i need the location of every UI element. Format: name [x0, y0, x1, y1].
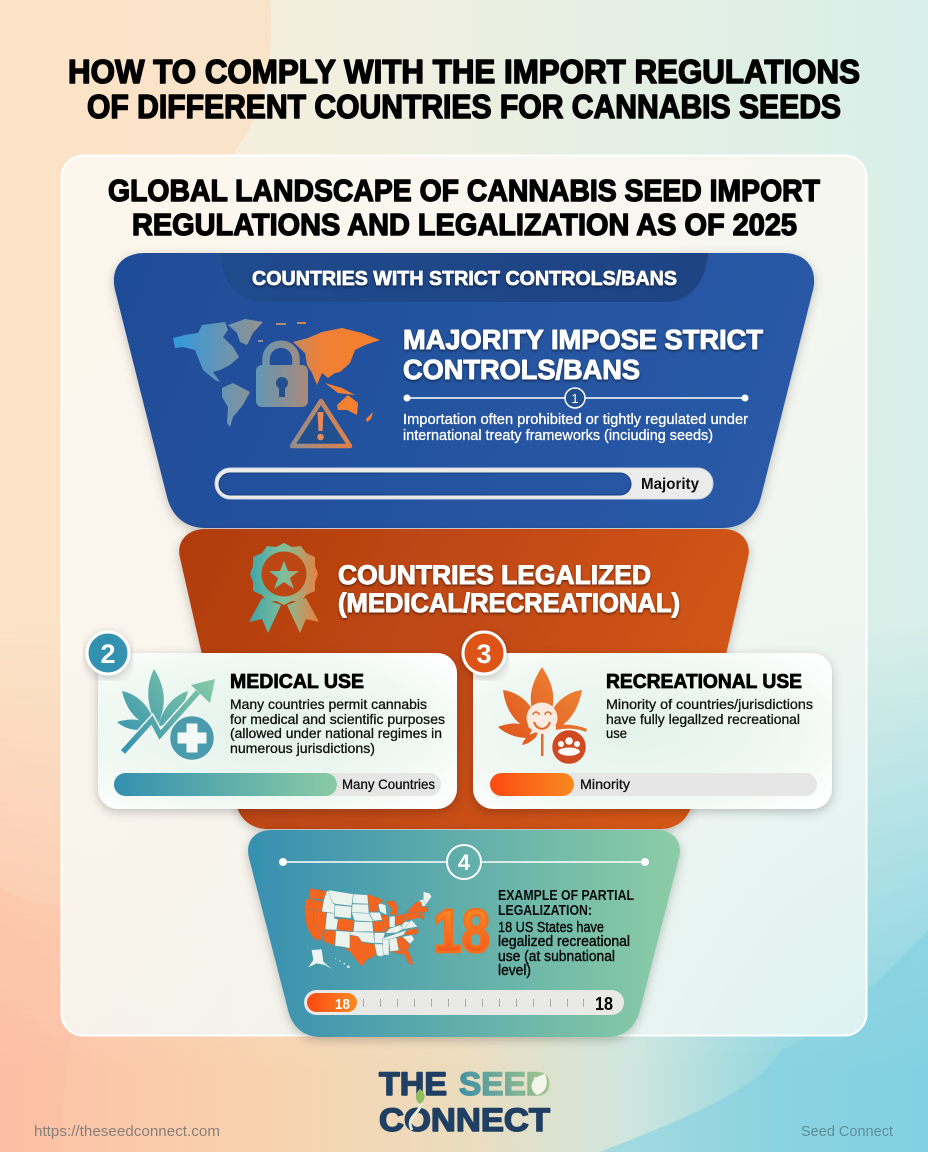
icon: warning triangle — [292, 401, 350, 446]
heading: majority: CONTROLS/BANS — [403, 354, 640, 385]
title: HOW TO COMPLY WITH THE IMPORT REGULATIONS — [68, 54, 860, 91]
logo: The Seed Connect: CONNECT — [379, 1102, 550, 1138]
badge 3 — [463, 632, 505, 674]
text: partial legalization — [498, 888, 634, 979]
bar: minority — [490, 773, 817, 796]
text: partial legalization: level) — [498, 963, 531, 979]
subtitle — [108, 173, 820, 242]
icon: medical leaf with arrow and plus — [117, 669, 215, 760]
text: recreational: Minority of countries/jurisdictions — [606, 696, 813, 712]
text: partial legalization: 18 US States have — [498, 920, 604, 936]
funnel tier 2: legalized — [179, 529, 749, 829]
text: partial legalization: legalized recreational — [498, 934, 630, 950]
icon: world map — [173, 319, 380, 427]
icon: rosette — [249, 543, 319, 633]
big number 18: 18 — [433, 897, 490, 965]
heading: majority: MAJORITY IMPOSE STRICT — [403, 324, 763, 355]
map: United States — [304, 888, 432, 969]
text: importation — [403, 411, 748, 444]
badge 2 — [87, 632, 129, 674]
text: recreational: use — [606, 725, 627, 741]
badge 2: 2 — [100, 639, 116, 669]
card: medical use — [98, 653, 457, 809]
heading: countries legalized: COUNTRIES LEGALIZED — [338, 560, 651, 590]
badge 3: 3 — [476, 639, 492, 669]
text: medical: (allowed under national regimes in — [230, 725, 442, 741]
footer: url: https://theseedconnect.com — [34, 1123, 220, 1140]
card: recreational use — [473, 653, 832, 809]
text: partial legalization: LEGALIZATION: — [498, 903, 592, 919]
subtitle: GLOBAL LANDSCAPE OF CANNABIS SEED IMPORT — [108, 173, 820, 208]
funnel tier 3: partial legalization — [248, 830, 680, 1037]
text: medical: numerous jurisdictions) — [230, 740, 375, 756]
heading: countries legalized: (MEDICAL/RECREATIONAL) — [338, 588, 680, 618]
text: recreational — [606, 696, 813, 741]
heading: countries legalized — [338, 560, 680, 618]
heading: majority — [403, 324, 763, 385]
text: medical: for medical and scientific purposes — [230, 711, 445, 727]
text: medical: Many countries permit cannabis — [230, 696, 427, 712]
panel: main card — [62, 156, 866, 1036]
step 1 marker: 1 — [571, 391, 579, 406]
footer: brand: Seed Connect — [801, 1123, 894, 1140]
step 4 marker: 4 — [458, 850, 471, 875]
text: partial legalization: use (at subnational — [498, 949, 615, 965]
title: OF DIFFERENT COUNTRIES FOR CANNABIS SEEDS — [87, 89, 841, 126]
bar: 18 states: 18 — [595, 994, 613, 1014]
tab heading — [220, 253, 708, 302]
heading: recreational use: RECREATIONAL USE — [606, 670, 802, 693]
icon: smiling leaf with group — [498, 667, 587, 764]
bar: 18 states: 18 — [335, 996, 350, 1013]
bar: minority: Minority — [580, 776, 630, 792]
bar: many countries: Many Countries — [342, 776, 435, 792]
tab heading: COUNTRIES WITH STRICT CONTROLS/BANS — [252, 268, 677, 290]
funnel tier 1: strict controls — [114, 253, 814, 528]
heading: medical use: MEDICAL USE — [230, 670, 364, 693]
logo: The Seed Connect: THE — [379, 1066, 447, 1102]
text: importation: international treaty frameworks (inciuding seeds) — [403, 427, 713, 444]
logo: The Seed Connect — [379, 1066, 550, 1138]
icon: padlock — [256, 344, 308, 407]
text: importation: Importation often prohibited or tightly regulated under — [403, 411, 748, 428]
step 1 marker — [404, 388, 748, 408]
text: recreational: have fully legallzed recreational — [606, 711, 800, 727]
step 4 marker — [279, 845, 649, 879]
bar: many countries — [114, 773, 441, 796]
text: medical — [230, 696, 445, 756]
logo: The Seed Connect: SEED — [459, 1066, 550, 1102]
subtitle: REGULATIONS AND LEGALIZATION AS OF 2025 — [132, 207, 797, 242]
title — [68, 54, 860, 126]
bar: majority — [215, 468, 713, 499]
bar: 18 states — [304, 990, 624, 1015]
text: partial legalization: EXAMPLE OF PARTIAL — [498, 888, 634, 904]
bar: majority: Majority — [641, 476, 699, 493]
